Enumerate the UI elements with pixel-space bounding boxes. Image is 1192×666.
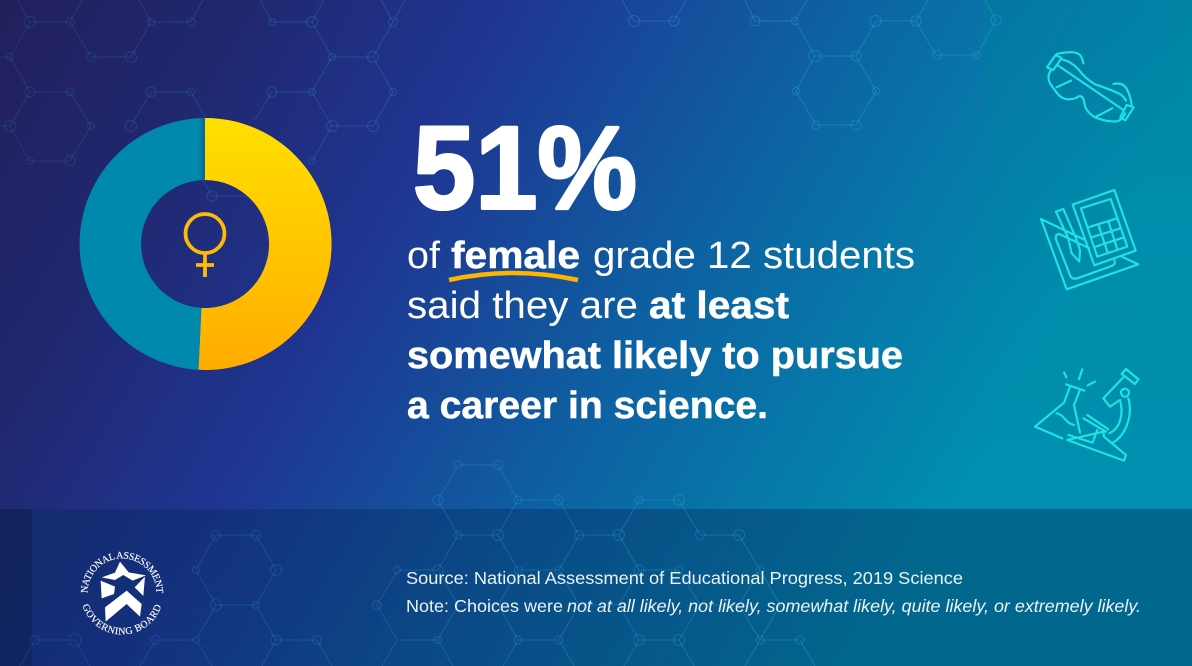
statement text bbox=[407, 235, 915, 427]
statement text: at least bbox=[649, 285, 789, 327]
icon: calculator and drafting tools bbox=[1041, 190, 1138, 289]
icon: female symbol bbox=[186, 214, 224, 277]
hexagon pattern: bottom bbox=[20, 460, 815, 666]
hexagon pattern: top bbox=[0, 0, 1001, 201]
donut seam shadow bbox=[198, 118, 205, 180]
statement text: a career in science. bbox=[407, 385, 768, 427]
donut chart bbox=[80, 118, 332, 370]
choices note: not at all likely, not likely, somewhat likely, quite likely, or extremely likely. bbox=[567, 596, 1141, 616]
donut segment: remaining 49% bbox=[80, 118, 205, 370]
icon: flask and microscope bbox=[1035, 369, 1138, 461]
statement text: of bbox=[407, 235, 440, 277]
source note: Source: National Assessment of Educational Progress, 2019 Science bbox=[406, 568, 963, 588]
statement text: said they are bbox=[407, 285, 638, 327]
statement text: grade 12 students bbox=[593, 235, 915, 277]
statement text: somewhat likely to pursue bbox=[407, 335, 903, 377]
big number: 51% bbox=[413, 102, 637, 234]
icon: safety goggles bbox=[1047, 52, 1134, 121]
choices note: Note: Choices were bbox=[406, 596, 563, 616]
logo text top: NATIONAL ASSESSMENT bbox=[80, 552, 164, 594]
footer band bbox=[0, 509, 1192, 666]
right icon panel bbox=[982, 0, 1192, 509]
underline bbox=[449, 273, 578, 280]
donut segment: 51% bbox=[198, 118, 332, 370]
logo text bottom: GOVERNING BOARD bbox=[83, 604, 160, 635]
logo star bbox=[101, 562, 146, 622]
statement text: female bbox=[451, 235, 580, 277]
logo: National Assessment Governing Board bbox=[80, 552, 164, 635]
